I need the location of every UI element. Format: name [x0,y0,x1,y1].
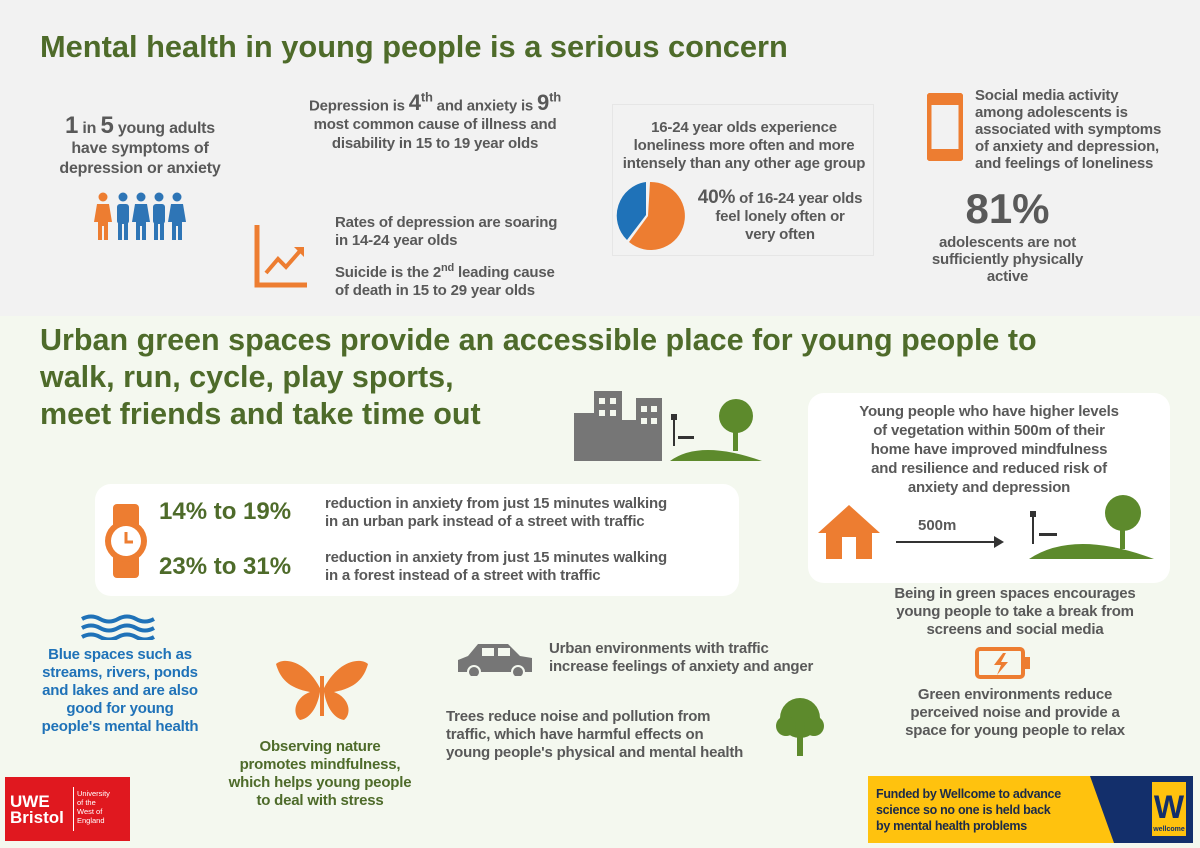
stat: depression 4th anxiety 9th: disability in 15 to 19 year olds [332,135,538,152]
panel: loneliness: 16-24 year olds experience [651,119,837,136]
text: observing nature: Observing nature [260,738,380,755]
text: blue spaces: streams, rivers, ponds [42,664,198,681]
panel: walking stats: 14% to 19% [159,498,291,525]
panel: loneliness: 40% of 16-24 year olds [698,187,862,208]
funder banner: Wellcome: by mental health problems [876,819,1027,833]
text: observing nature: promotes mindfulness, [240,756,400,773]
panel: vegetation 500m [808,393,1170,583]
top panel background [0,0,1200,316]
panel: vegetation 500m: and resilience and reduced risk of [871,460,1107,477]
stat: 1 in 5: depression or anxiety [59,160,221,177]
text: green environments: space for young people to relax [905,722,1125,739]
panel: loneliness: loneliness more often and more [634,137,854,154]
icon: watch [105,504,147,578]
stat: 1 in 5 [59,112,221,177]
logo: UWE Bristol: Bristol [10,808,64,827]
stat: social media [975,87,1161,172]
funder banner: Wellcome: science so no one is held back [876,803,1050,817]
icon: tree [776,698,824,756]
section 2 heading [40,323,1037,431]
icon: park bench tree [1029,495,1154,559]
panel: walking stats: in an urban park instead of a street with traffic [325,513,644,530]
text: screens break [894,585,1136,638]
pie chart [616,182,685,250]
text: trees reduce noise: Trees reduce noise and pollution from [446,708,710,725]
icon: waves [81,614,155,640]
panel: loneliness: very often [745,226,815,243]
text: urban environments: Urban environments with traffic [549,640,769,657]
text: blue spaces: and lakes and are also [42,682,198,699]
section 2 heading: Urban green spaces provide an accessible place for young people to [40,323,1037,357]
arrow 500m: 500m [918,517,956,534]
text: observing nature: to deal with stress [256,792,384,809]
panel: walking stats: reduction in anxiety from just 15 minutes walking [325,549,667,566]
section 2 heading: walk, run, cycle, play sports, [40,360,454,394]
text: observing nature: which helps young people [229,774,411,791]
funder banner: Wellcome: wellcome [1152,826,1185,833]
stat: social media: Social media activity [975,87,1118,104]
funder banner: Wellcome: Funded by Wellcome to advance [876,787,1061,801]
icon: city and park [574,391,762,461]
stat: depression rates and suicide: Suicide is the 2nd leading cause [335,262,555,281]
panel: loneliness [612,104,874,256]
stat: 81%: adolescents are not [939,234,1076,251]
panel: vegetation 500m: anxiety and depression [908,479,1070,496]
stat: 1 in 5: 1 in 5 young adults [65,112,215,139]
panel: vegetation 500m: Young people who have higher levels [859,403,1119,420]
stat: social media: associated with symptoms [975,121,1161,138]
title: Mental health in young people is a serious concern [40,29,788,64]
logo: UWE Bristol [5,777,130,841]
stat: 81%: active [987,268,1028,285]
panel: loneliness: intensely than any other age group [623,155,865,172]
icon: butterfly [276,660,368,720]
panel: walking stats: in a forest instead of a street with traffic [325,567,600,584]
icon: battery [975,647,1030,679]
stat: 81% [932,185,1084,285]
logo: UWE Bristol: UWE [10,792,50,811]
stat: social media: of anxiety and depression, [975,138,1159,155]
text: blue spaces: Blue spaces such as [48,646,192,663]
text: urban environments [549,640,814,675]
stat: 81%: 81% [965,185,1050,232]
text: trees reduce noise [446,708,743,761]
logo: UWE Bristol: England [77,816,105,825]
text: trees reduce noise: young people's physical and mental health [446,744,743,761]
panel: vegetation 500m: of vegetation within 500m of their [873,422,1105,439]
stat: depression 4th anxiety 9th [309,90,561,152]
panel: walking stats [95,484,739,596]
stat: 81%: sufficiently physically [932,251,1083,268]
text: blue spaces [42,646,198,735]
stat: depression rates and suicide: in 14-24 year olds [335,232,457,249]
stat: social media: and feelings of loneliness [975,155,1153,172]
stat: depression rates and suicide: of death in 15 to 29 year olds [335,282,535,299]
panel: loneliness: feel lonely often or [715,208,845,225]
funder banner: Wellcome [868,776,1193,843]
text: trees reduce noise: traffic, which have harmful effects on [446,726,703,743]
stat: social media: among adolescents is [975,104,1128,121]
text: blue spaces: people's mental health [42,718,198,735]
stat: depression 4th anxiety 9th: Depression is 4th and anxiety is 9th [309,90,561,115]
text: urban environments: increase feelings of anxiety and anger [549,658,813,675]
text: screens break: young people to take a break from [896,603,1134,620]
stat: 1 in 5: have symptoms of [71,140,209,157]
stat: depression 4th anxiety 9th: most common cause of illness and [314,116,556,133]
stat: depression rates and suicide [335,214,557,299]
text: blue spaces: good for young [66,700,174,717]
text: screens break: Being in green spaces encourages [894,585,1136,602]
section 2 heading: meet friends and take time out [40,397,481,431]
icon: rising chart [254,225,307,288]
logo: UWE Bristol: West of [77,807,102,816]
text: green environments: perceived noise and provide a [910,704,1120,721]
icon: house [818,505,880,559]
icon: car [458,644,532,676]
funder banner: Wellcome: W [1154,789,1185,825]
text: screens break: screens and social media [927,621,1103,638]
text: green environments [905,686,1125,739]
stat: depression rates and suicide: Rates of depression are soaring [335,214,557,231]
text: green environments: Green environments reduce [918,686,1112,703]
text: observing nature [228,738,412,809]
panel: walking stats: 23% to 31% [159,553,291,580]
logo: UWE Bristol: of the [77,798,96,807]
panel: vegetation 500m: home have improved mindfulness [871,441,1107,458]
panel: walking stats: reduction in anxiety from just 15 minutes walking [325,495,667,512]
icon: phone [927,93,963,161]
icon: people [94,192,186,240]
logo: UWE Bristol: University [77,789,110,798]
